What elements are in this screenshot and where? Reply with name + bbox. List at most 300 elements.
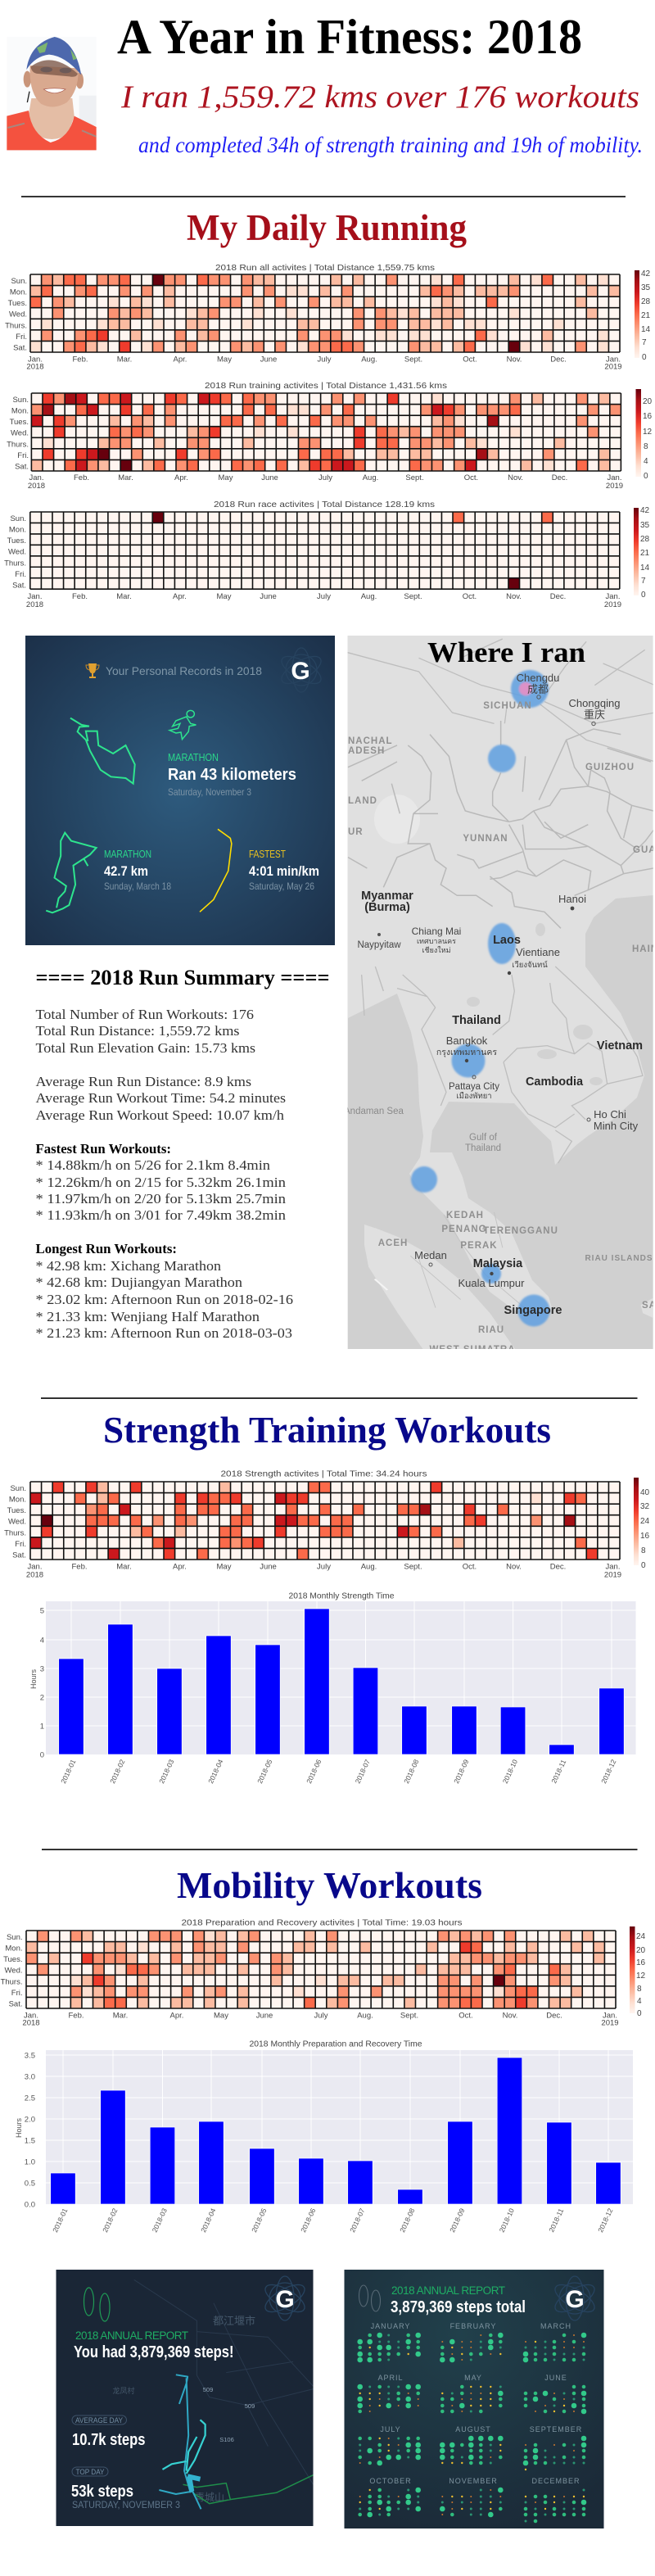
- heatmap: strength activities: 32: [640, 1502, 650, 1511]
- calendar: june: [526, 2374, 584, 2411]
- bar chart: monthly strength time: 2: [40, 1694, 44, 1702]
- heatmap: run training activities: 4: [644, 457, 648, 466]
- map: labels: 成都: [527, 683, 549, 695]
- heatmap: preparation and recovery activities: Dec.: [546, 2012, 562, 2020]
- heatmap: preparation and recovery activities: Wed.: [4, 1967, 23, 1976]
- heatmap: run race activities: Sat.: [12, 581, 26, 590]
- map: labels: ADESH: [348, 746, 385, 756]
- map: labels: RIAU ISLANDS: [585, 1254, 653, 1263]
- map: labels: ACEH: [378, 1238, 408, 1248]
- bar chart: monthly preparation and recovery time: 2018-01: [51, 2207, 70, 2234]
- text block: 2018 run summary: Total Run Elevation Gain: 15.73 kms: [36, 1040, 255, 1056]
- heatmap: preparation and recovery activities: Sept.: [400, 2012, 418, 2020]
- heatmap: all run activities: Aug.: [361, 355, 377, 364]
- heatmap: run training activities: Thurs.: [7, 440, 29, 449]
- heatmap: all run activities: Mon.: [10, 288, 27, 297]
- record: marathon 42.7 km: 42.7 km: [104, 863, 148, 879]
- bar chart: monthly strength time: 2018-02: [108, 1758, 127, 1785]
- heatmap: all run activities: 2018: [26, 362, 44, 372]
- report heading: 2018 ANNUAL REPORT: [75, 2329, 188, 2342]
- text block: 2018 run summary: * 42.98 km: Xichang Marathon: [36, 1258, 222, 1274]
- heatmap: preparation and recovery activities: May: [214, 2012, 228, 2020]
- subtitle: strength and mobility: and completed 34h of strength training and 19h of mobility.: [138, 133, 643, 157]
- panel: personal records: [25, 636, 335, 945]
- heatmap: strength activities: Mar.: [116, 1563, 132, 1571]
- heatmap: strength activities: May: [217, 1563, 232, 1571]
- map: labels: Thailand: [465, 1143, 501, 1153]
- heatmap: run race activities: Oct.: [463, 592, 477, 601]
- stat: top day: [71, 2467, 180, 2510]
- calendar: may: [442, 2374, 500, 2411]
- heatmap: all run activities: Sun.: [11, 277, 27, 286]
- heatmap: run training activities: 16: [643, 412, 653, 421]
- bar chart: monthly strength time: 5: [40, 1607, 44, 1615]
- panel: steps annual report: S106: [219, 2436, 234, 2443]
- text block: 2018 run summary: * 23.02 km: Afternoon Run on 2018-02-16: [36, 1292, 293, 1307]
- text block: 2018 run summary: Average Run Run Distance: 8.9 kms: [36, 1074, 251, 1089]
- subtitle: running total: I ran 1,559.72 kms over 176 workouts: [120, 79, 639, 115]
- heatmap: run training activities: July: [318, 473, 332, 482]
- bar chart: monthly strength time: 2018-08: [402, 1758, 421, 1785]
- heatmap: all run activities: Sat.: [13, 343, 27, 352]
- text block: 2018 run summary: Total Run Distance: 1,559.72 kms: [36, 1023, 239, 1039]
- map: labels: NACHAL: [348, 736, 393, 746]
- heading: strength training workouts: Strength Training Workouts: [103, 1409, 551, 1451]
- map: labels: Laos: [493, 934, 521, 947]
- text block: 2018 run summary: Total Number of Run Workouts: 176: [36, 1007, 254, 1022]
- map: labels: LAND: [348, 796, 377, 806]
- map: labels: Malaysia: [473, 1257, 523, 1270]
- map: labels: Pattaya City: [449, 1082, 499, 1092]
- heatmap: all run activities: Jan.: [28, 355, 43, 364]
- heatmap: all run activities: Wed.: [9, 310, 27, 319]
- gps tracks: [159, 2375, 314, 2509]
- heatmap: all run activities: Fri.: [16, 333, 27, 342]
- heatmap: run training activities: Sun.: [12, 396, 29, 405]
- bar chart: monthly strength time: 3: [40, 1664, 44, 1674]
- steps total: 3,879,369 steps total: [391, 2298, 526, 2316]
- heatmap: strength activities: 24: [640, 1517, 650, 1526]
- calendar: january: [360, 2322, 418, 2360]
- heatmap: run training activities: 2019: [606, 482, 623, 491]
- heatmap: run training activities: Feb.: [74, 473, 89, 482]
- map: sumatra and borneo: [364, 1225, 655, 1349]
- bar chart: monthly strength time: 2018-11: [549, 1759, 567, 1785]
- heatmap: run race activities: Jan.: [606, 592, 620, 601]
- route: fastest run: [200, 829, 232, 912]
- record: fastest: 4:01 min/km: [249, 863, 319, 879]
- icon: G logo: [551, 2276, 599, 2320]
- calendar: september: SEPTEMBER: [530, 2425, 582, 2433]
- heatmap: run race activities: Sun.: [10, 514, 26, 523]
- calendar: march: MARCH: [540, 2322, 571, 2330]
- bar chart: monthly strength time: 2018-09: [452, 1758, 471, 1785]
- calendar: december: [526, 2477, 584, 2521]
- heatmap: strength activities: Tues.: [7, 1506, 26, 1515]
- bar chart: monthly preparation and recovery time: 2018 Monthly Preparation and Recovery Time: [249, 2040, 422, 2049]
- map: labels: Cambodia: [526, 1075, 584, 1089]
- map: labels: Naypyitaw: [357, 940, 401, 950]
- text block: 2018 run summary: * 42.68 km: Dujiangyan Marathon: [36, 1274, 243, 1290]
- heatmap: run training activities: Wed.: [11, 429, 29, 438]
- heatmap: run race activities: Sept.: [404, 592, 422, 601]
- bar chart: monthly preparation and recovery time: 1.5: [25, 2136, 35, 2146]
- heatmap: run race activities: May: [217, 592, 232, 601]
- heatmap: preparation and recovery activities: Mar.: [113, 2012, 128, 2020]
- bar chart: monthly preparation and recovery time: 2018-10: [498, 2207, 516, 2234]
- heatmap: strength activities: Apr.: [173, 1563, 187, 1571]
- heatmap: run race activities: 21: [640, 549, 650, 558]
- heatmap: run race activities: Mon.: [9, 526, 26, 535]
- bar chart: monthly strength time: Hours: [29, 1669, 38, 1689]
- calendar: december: DECEMBER: [531, 2477, 580, 2485]
- title: A Year in Fitness: 2018: [117, 10, 582, 64]
- heatmap: all run activities: Nov.: [507, 355, 522, 364]
- heatmap: preparation and recovery activities: 2018: [22, 2018, 40, 2028]
- bar chart: monthly preparation and recovery time: 2018-03: [151, 2207, 169, 2234]
- bar chart: monthly preparation and recovery time: 2018-04: [199, 2207, 218, 2234]
- icon: G logo: G: [565, 2286, 585, 2313]
- calendar: september: [526, 2425, 584, 2470]
- text block: 2018 run summary: Longest Run Workouts:: [36, 1241, 177, 1256]
- bar chart: monthly preparation and recovery time: 0.5: [25, 2179, 35, 2189]
- record: marathon 42.7 km: Sunday, March 18: [104, 881, 171, 892]
- heatmap: strength activities: Feb.: [71, 1563, 88, 1571]
- calendar: february: [442, 2322, 500, 2360]
- bar chart: monthly strength time: 2018-03: [157, 1758, 176, 1785]
- heatmap: strength activities: 40: [640, 1488, 650, 1497]
- text block: 2018 run summary: * 11.93km/h on 3/01 for 7.49km 38.2min: [36, 1207, 287, 1223]
- heatmap: preparation and recovery activities: Tues.: [3, 1955, 23, 1964]
- heatmap: preparation and recovery activities: Feb.: [68, 2012, 84, 2020]
- heatmap: preparation and recovery activities: 0: [637, 2009, 642, 2018]
- heatmap: all run activities: Feb.: [72, 355, 88, 364]
- panel: steps annual report: 509: [245, 2402, 255, 2410]
- heatmap: strength activities: Jan.: [606, 1563, 620, 1571]
- map: labels: Chongqing: [569, 697, 620, 709]
- heatmap: all run activities: 0: [642, 353, 647, 362]
- icon: G logo: [264, 2275, 305, 2321]
- heatmap: run training activities: 12: [643, 428, 653, 437]
- icon: G logo: G: [291, 658, 310, 685]
- report heading: 2018 ANNUAL REPORT: [391, 2284, 505, 2297]
- bar chart: monthly preparation and recovery time: [15, 2040, 633, 2234]
- panel: steps annual report: 509: [203, 2386, 213, 2393]
- map: roads central: [348, 721, 653, 928]
- heatmap: all run activities: 35: [641, 283, 651, 292]
- bar chart: monthly preparation and recovery time: 2018-11: [547, 2207, 565, 2234]
- map: labels: เมืองพัทยา: [456, 1092, 492, 1101]
- map: labels: Chengdu: [517, 672, 559, 684]
- heatmap: strength activities: Thurs.: [4, 1528, 26, 1537]
- heatmap: run training activities: 8: [644, 442, 648, 451]
- text block: 2018 run summary: Fastest Run Workouts:: [36, 1141, 171, 1157]
- records header: Your Personal Records in 2018: [106, 664, 262, 677]
- heatmap: strength activities: Mon.: [9, 1496, 26, 1505]
- icon: runner: [169, 710, 196, 740]
- heatmap: run race activities: 28: [640, 535, 650, 544]
- panel: steps annual report: 龙凤村: [112, 2386, 135, 2395]
- heatmap: preparation and recovery activities: 16: [636, 1958, 646, 1967]
- heatmap: run race activities: July: [317, 592, 331, 601]
- map: labels: [344, 672, 655, 1355]
- route: march marathon: [46, 833, 97, 912]
- map: labels: SICHUAN: [483, 701, 532, 711]
- calendar: april: APRIL: [377, 2374, 404, 2382]
- heatmap: strength activities: Sun.: [10, 1484, 26, 1493]
- map: labels: PENANG: [441, 1225, 487, 1234]
- heatmap: preparation and recovery activities: June: [256, 2012, 273, 2020]
- bar chart: monthly preparation and recovery time: 2018-02: [101, 2207, 120, 2234]
- bar chart: monthly preparation and recovery time: 2.5: [25, 2094, 35, 2103]
- heatmap: run training activities: Jan.: [608, 473, 621, 482]
- calendar: march: [526, 2322, 584, 2360]
- stat: average day: [72, 2415, 146, 2449]
- calendar: june: JUNE: [544, 2374, 567, 2382]
- map: labels: เทศบาลนคร: [417, 937, 456, 945]
- heatmap: strength activities: 2018 Strength activites | Total Time: 34.24 hours: [221, 1469, 427, 1479]
- map: labels: Chiang Mai: [412, 926, 461, 937]
- heatmap: preparation and recovery activities: Mon.: [5, 1944, 23, 1954]
- bar chart: monthly strength time: 2018-05: [255, 1758, 274, 1785]
- heatmap: run race activities: 42: [640, 506, 650, 515]
- text block: 2018 run summary: Average Run Workout Time: 54.2 minutes: [36, 1090, 286, 1106]
- text block: 2018 run summary: * 12.26km/h on 2/15 for 5.32km 26.1min: [36, 1175, 287, 1190]
- bar chart: monthly preparation and recovery time: 3.5: [25, 2051, 35, 2061]
- bar chart: monthly strength time: 2018-10: [501, 1758, 519, 1785]
- text block: 2018 run summary: [36, 966, 329, 1341]
- heatmap: preparation and recovery activities: Sat.: [9, 1999, 23, 2008]
- steps total: You had 3,879,369 steps!: [74, 2343, 234, 2361]
- heatmap: strength activities: Aug.: [361, 1563, 377, 1571]
- bar chart: monthly preparation and recovery time: 3.0: [25, 2072, 35, 2082]
- heatmap: preparation and recovery activities: Fri.: [11, 1989, 23, 1998]
- heatmap: preparation and recovery activities: July: [314, 2012, 328, 2020]
- heatmap: all run activities: 28: [641, 297, 651, 306]
- heatmap: preparation and recovery activities: 8: [637, 1985, 642, 1994]
- heatmap: strength activities: 16: [640, 1532, 650, 1541]
- panel: steps annual report: 青城山: [195, 2492, 224, 2503]
- heatmap: run training activities: Aug.: [363, 473, 378, 482]
- map: labels: RIAU: [478, 1325, 504, 1335]
- heatmap: run training activities: Dec.: [552, 473, 567, 482]
- map: labels: เชียงใหม่: [422, 946, 451, 954]
- panel: map where I ran: [344, 636, 655, 1355]
- heatmap: run training activities: Oct.: [464, 473, 478, 482]
- heatmap: run training activities: 2018 Run training activites | Total Distance 1,431.56 kms: [205, 381, 447, 391]
- heatmap: run training activities: Fri.: [17, 451, 29, 460]
- route: november marathon: [70, 718, 135, 784]
- text block: 2018 run summary: ==== 2018 Run Summary ====: [36, 966, 329, 989]
- text block: 2018 run summary: * 21.23 km: Afternoon Run on 2018-03-03: [36, 1325, 292, 1341]
- map: labels: WEST SUMATRA: [429, 1345, 516, 1355]
- bar chart: monthly strength time: 4: [40, 1637, 44, 1645]
- map: labels: Thailand: [452, 1014, 501, 1027]
- heatmap: strength activities: Oct.: [463, 1563, 477, 1571]
- icon: G logo: [278, 648, 325, 692]
- calendar: july: [360, 2425, 418, 2463]
- heatmap: run race activities: Tues.: [7, 536, 26, 546]
- bar chart: monthly preparation and recovery time: 1.0: [25, 2157, 35, 2167]
- record: marathon 42.7 km: MARATHON: [104, 848, 151, 860]
- bar chart: monthly preparation and recovery time: 2018-06: [299, 2207, 318, 2234]
- map: labels: Kuala Lumpur: [458, 1277, 525, 1289]
- heatmap: run training activities: 0: [644, 472, 648, 481]
- bar chart: monthly preparation and recovery time: 2.0: [25, 2115, 35, 2125]
- bar chart: monthly preparation and recovery time: Hours: [15, 2118, 23, 2138]
- heatmap: all run activities: 2019: [604, 362, 622, 372]
- bar chart: monthly preparation and recovery time: 2018-08: [398, 2207, 417, 2234]
- map: labels: (Burma): [364, 901, 410, 914]
- heatmap: all run activities: July: [318, 355, 332, 364]
- stat: top day: SATURDAY, NOVEMBER 3: [72, 2499, 180, 2510]
- heatmap: strength activities: [4, 1469, 650, 1579]
- heatmap: all run activities: Tues.: [8, 299, 27, 308]
- heatmap: run race activities: Mar.: [116, 592, 132, 601]
- heatmap: run training activities: Mon.: [11, 407, 29, 416]
- heatmap: all run activities: 42: [641, 269, 651, 278]
- text block: 2018 run summary: * 14.88km/h on 5/26 for 2.1km 8.4min: [36, 1157, 271, 1173]
- heatmap: preparation and recovery activities: Thurs.: [1, 1977, 23, 1986]
- heatmap: run race activities: June: [260, 592, 277, 601]
- map: roads north: [348, 639, 655, 762]
- calendar: july: JULY: [380, 2425, 401, 2433]
- icon: G logo: G: [275, 2286, 295, 2313]
- map: labels: GUIZHOU: [585, 763, 635, 772]
- heatmap: run training activities: Apr.: [174, 473, 188, 482]
- heatmap: all run activities: 2018 Run all activites | Total Distance 1,559.75 kms: [215, 263, 435, 273]
- map: labels: Vietnam: [597, 1039, 643, 1053]
- map: heading where I ran: Where I ran: [427, 636, 585, 668]
- heatmap: preparation and recovery activities: [1, 1918, 646, 2028]
- record: marathon 43 km: MARATHON: [168, 751, 219, 763]
- heatmap: all run activities: June: [260, 355, 277, 364]
- heatmap: all run activities: Mar.: [117, 355, 132, 364]
- heatmap: strength activities: 8: [641, 1546, 646, 1555]
- heatmap: run training activities: Sept.: [405, 473, 424, 482]
- calendar: october: OCTOBER: [369, 2477, 412, 2485]
- calendar: april: [360, 2374, 418, 2411]
- record: marathon 42.7 km: [104, 848, 171, 892]
- heatmap: all run activities: Dec.: [550, 355, 567, 364]
- heatmap: run training activities: Nov.: [508, 473, 523, 482]
- map: labels: 重庆: [584, 709, 605, 721]
- heatmap: preparation and recovery activities: Jan.: [603, 2012, 617, 2020]
- faint street map: [134, 2279, 314, 2484]
- heatmap: preparation and recovery activities: 20: [636, 1946, 646, 1955]
- heatmap: all run activities: Oct.: [463, 355, 477, 364]
- heatmap: strength activities: 2018: [26, 1571, 43, 1579]
- panel: steps annual report: [56, 2270, 314, 2526]
- calendar: august: AUGUST: [455, 2425, 491, 2433]
- heatmap: all run activities: 21: [641, 311, 651, 320]
- record: fastest: [249, 848, 319, 892]
- heatmap: run race activities: Jan.: [28, 592, 42, 601]
- icon: trophy: [86, 663, 99, 678]
- map: province patches: [467, 923, 603, 1085]
- bar chart: monthly strength time: 2018-01: [59, 1758, 78, 1785]
- bar chart: monthly strength time: 2018-04: [206, 1758, 225, 1785]
- map: labels: TERENGGANU: [483, 1226, 558, 1236]
- heatmap: all run activities: Jan.: [606, 355, 621, 364]
- heatmap: run training activities: Tues.: [10, 418, 29, 427]
- heatmap: run training activities: 20: [643, 397, 653, 406]
- bar chart: monthly strength time: 2018 Monthly Strength Time: [288, 1592, 395, 1600]
- heatmap: all run activities: Apr.: [174, 355, 187, 364]
- record: marathon 43 km: Ran 43 kilometers: [168, 766, 296, 784]
- panel: steps calendar: [344, 2270, 604, 2528]
- bar chart: monthly preparation and recovery time: 2018-05: [250, 2207, 269, 2234]
- heatmap: all run activities: 7: [642, 338, 647, 347]
- heatmap: preparation and recovery activities: 24: [636, 1932, 646, 1941]
- heatmap: strength activities: June: [260, 1563, 277, 1571]
- heatmap: preparation and recovery activities: 4: [637, 1997, 642, 2006]
- map: heat spots: [411, 670, 550, 1327]
- heatmap: run training activities: June: [261, 473, 278, 482]
- heatmap: preparation and recovery activities: Nov.: [503, 2012, 517, 2020]
- map: labels: Hanoi: [558, 893, 586, 905]
- calendar: october: [360, 2477, 418, 2515]
- heatmap: run race activities: 0: [641, 591, 646, 600]
- heading: my daily running: My Daily Running: [187, 207, 467, 248]
- stat: average day: AVERAGE DAY: [75, 2416, 124, 2425]
- heatmap: run race activities: 2018: [26, 600, 43, 609]
- heatmap: run race activities: Fri.: [15, 570, 26, 579]
- heatmap: run race activities: 14: [640, 564, 650, 573]
- heatmap: run race activities: Wed.: [8, 548, 26, 557]
- panel: steps annual report: 都江堰市: [213, 2315, 255, 2327]
- calendar: november: NOVEMBER: [449, 2477, 498, 2485]
- heatmap: run race activities: [4, 500, 650, 609]
- heading: mobility workouts: Mobility Workouts: [177, 1864, 482, 1906]
- heatmap: run training activities: 2018: [28, 482, 45, 491]
- heatmap: run race activities: 2019: [604, 600, 621, 609]
- icon: grey footprints: [359, 2285, 380, 2311]
- heatmap: all run activities: [5, 263, 651, 372]
- heatmap: run training activities: May: [219, 473, 233, 482]
- bar chart: monthly strength time: [29, 1592, 635, 1785]
- heatmap: all run activities: 14: [641, 325, 651, 334]
- map: labels: กรุงเทพมหานคร: [436, 1048, 497, 1057]
- text block: 2018 run summary: * 21.33 km: Wenjiang Half Marathon: [36, 1309, 260, 1324]
- stat: top day: TOP DAY: [75, 2468, 105, 2477]
- heatmap: preparation and recovery activities: Aug.: [357, 2012, 373, 2020]
- map: labels: YUNNAN: [463, 834, 508, 844]
- heatmap: strength activities: Sat.: [12, 1551, 26, 1560]
- heatmap: run race activities: Aug.: [361, 592, 377, 601]
- heatmap: preparation and recovery activities: Sun.: [7, 1933, 23, 1942]
- heatmap: preparation and recovery activities: 2019: [601, 2018, 619, 2028]
- map: labels: Vientiane: [516, 946, 560, 958]
- map: labels: Myanmar: [361, 890, 413, 903]
- heatmap: all run activities: Thurs.: [5, 321, 27, 330]
- heatmap: strength activities: July: [317, 1563, 331, 1571]
- map: roads south: [362, 967, 643, 1163]
- calendar: january: JANUARY: [371, 2322, 410, 2330]
- heatmap: run training activities: Sat.: [15, 462, 29, 471]
- heatmap: run race activities: 7: [641, 577, 646, 586]
- heatmap: run race activities: Thurs.: [4, 559, 26, 568]
- heatmap: run race activities: 35: [640, 521, 650, 530]
- heatmap: strength activities: Dec.: [550, 1563, 566, 1571]
- bar chart: monthly strength time: 1: [40, 1722, 44, 1732]
- map: labels: Gulf of: [469, 1133, 498, 1143]
- heatmap: all run activities: Sept.: [404, 355, 422, 364]
- map: labels: Medan: [414, 1249, 447, 1261]
- heatmap: preparation and recovery activities: Apr.: [170, 2012, 183, 2020]
- map: labels: Minh City: [594, 1120, 639, 1132]
- map: labels: Singapore: [504, 1304, 562, 1317]
